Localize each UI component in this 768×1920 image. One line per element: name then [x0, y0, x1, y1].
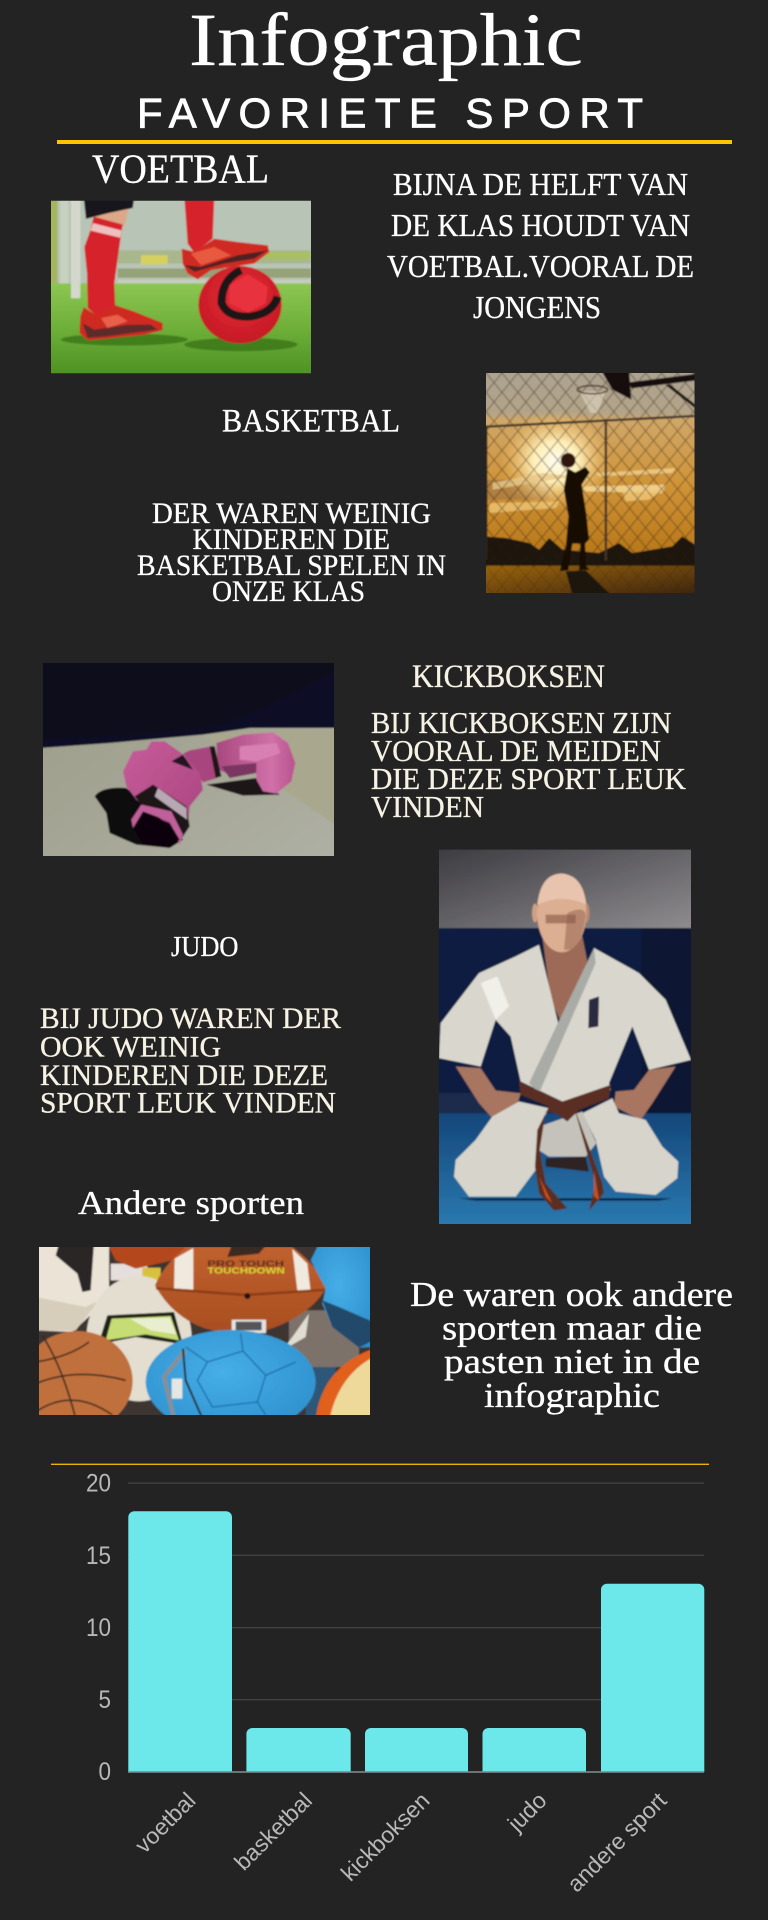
x axis labels: kickboksen [336, 1787, 435, 1886]
photo: basketball player at sunset [486, 373, 694, 593]
text: basketbal [137, 497, 446, 608]
text: voetbal: VOETBAL.VOORAL DE [387, 248, 694, 284]
x axis labels [130, 1787, 672, 1897]
text: andere sporten: De waren ook andere [410, 1275, 733, 1314]
yellow divider [57, 140, 732, 144]
y axis labels: 20 [86, 1470, 111, 1498]
text: kickboksen: VOORAL DE MEIDEN [371, 734, 661, 768]
bar: andere sport 13 [601, 1584, 704, 1772]
heading: judo: JUDO [171, 931, 238, 963]
text: kickboksen: DIE DEZE SPORT LEUK [371, 762, 686, 796]
text: voetbal: BIJNA DE HELFT VAN [393, 166, 688, 202]
text: andere sporten [410, 1275, 733, 1415]
text: voetbal: DE KLAS HOUDT VAN [391, 207, 690, 243]
text: kickboksen: BIJ KICKBOKSEN ZIJN [371, 706, 672, 740]
text: voetbal: JONGENS [473, 289, 601, 325]
text: judo [40, 1002, 341, 1120]
heading: andere sporten: Andere sporten [78, 1185, 304, 1222]
bar chart [86, 1470, 704, 1897]
heading: voetbal: VOETBAL [92, 145, 269, 191]
photo: pile of balls [39, 1247, 370, 1415]
photo: pink boxing gloves [43, 663, 334, 856]
text: judo: OOK WEINIG [40, 1031, 221, 1064]
photo: pile of balls: PRO TOUCH [207, 1258, 284, 1268]
bar: voetbal 18 [128, 1511, 232, 1772]
heading: basketbal: BASKETBAL [222, 404, 400, 440]
text: basketbal: KINDEREN DIE [192, 523, 390, 556]
x axis labels: judo [502, 1787, 552, 1837]
gold divider [51, 1464, 709, 1465]
heading: kickboksen: KICKBOKSEN [412, 659, 605, 695]
text: kickboksen: VINDEN [371, 790, 484, 824]
text: judo: BIJ JUDO WAREN DER [40, 1002, 341, 1035]
bar: kickboksen 3 [365, 1728, 468, 1772]
text: basketbal: BASKETBAL SPELEN IN [137, 549, 446, 582]
text: andere sporten: pasten niet in de [444, 1342, 700, 1381]
y axis labels: 10 [86, 1614, 111, 1642]
x axis labels: voetbal [130, 1787, 201, 1858]
text: basketbal: ONZE KLAS [212, 575, 365, 608]
text: andere sporten: sporten maar die [442, 1308, 702, 1347]
bar: judo 3 [482, 1728, 586, 1772]
x axis labels: basketbal [229, 1787, 317, 1875]
photo: football player with ball [51, 200, 311, 374]
x axis labels: andere sport [562, 1787, 672, 1897]
photo: judoka kneeling in white gi [439, 850, 691, 1224]
text: kickboksen [371, 706, 686, 824]
text: judo: KINDEREN DIE DEZE [40, 1059, 328, 1092]
y axis labels: 5 [98, 1686, 111, 1714]
bar: basketbal 3 [246, 1728, 351, 1772]
text: andere sporten: infographic [484, 1376, 660, 1415]
text: voetbal [387, 166, 694, 325]
subtitle: FAVORIETE SPORT [137, 90, 643, 136]
photo: pile of balls: TOUCHDOWN [207, 1267, 285, 1276]
y axis labels: 0 [98, 1758, 111, 1786]
text: judo: SPORT LEUK VINDEN [40, 1086, 336, 1120]
y axis labels [86, 1470, 111, 1786]
title: Infographic [189, 0, 583, 82]
y axis labels: 15 [86, 1542, 111, 1570]
text: basketbal: DER WAREN WEINIG [152, 497, 431, 530]
